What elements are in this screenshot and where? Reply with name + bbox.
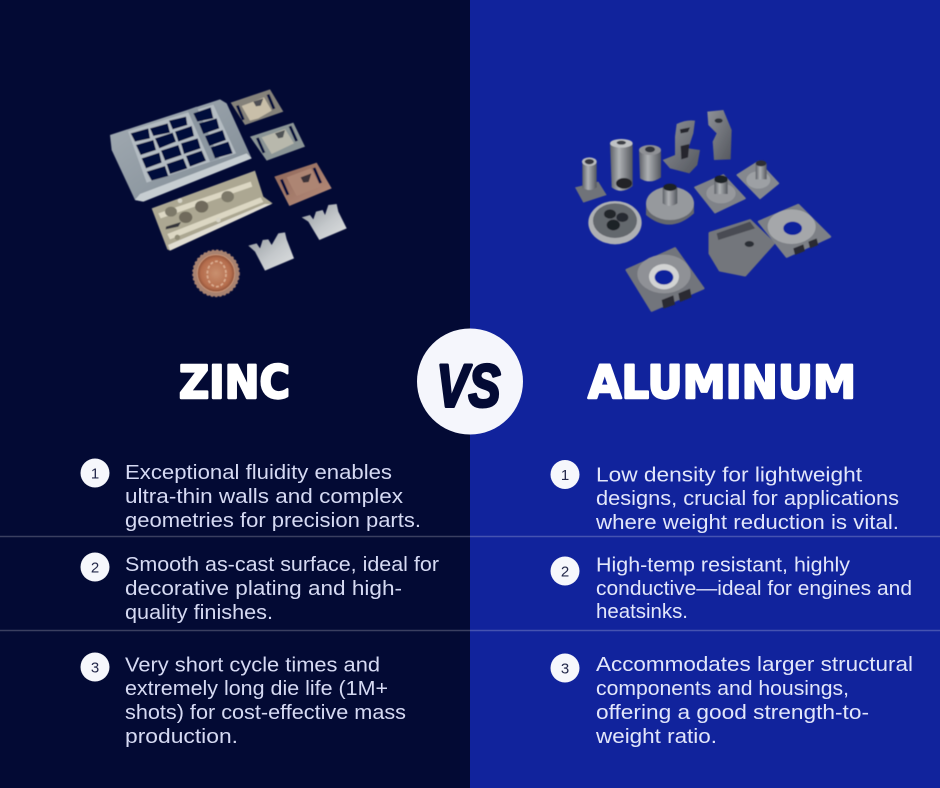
point 2 zinc: Smooth as-cast surface, ideal for [125,553,439,576]
point 3 aluminum: weight ratio. [595,725,717,748]
part: angled block [707,110,732,160]
point 2 aluminum: High-temp resistant, highly [596,554,851,576]
point 3 aluminum: components and housings, [596,677,849,700]
point 2 zinc: quality finishes. [125,601,273,624]
part: square flange middle [695,175,745,213]
point 3 zinc [80,652,406,748]
point 1 aluminum: where weight reduction is vital. [595,511,899,534]
part: short cylinder [639,145,661,181]
point 1 zinc: geometries for precision parts. [125,509,421,532]
part: clip two [302,204,347,240]
point 3 zinc: production. [125,725,238,748]
point 1 aluminum: 1 [561,467,569,484]
point 1 zinc: Exceptional fluidity enables [125,461,392,484]
point 1 aluminum [550,460,899,534]
point 2 zinc: 2 [91,560,99,576]
point 3 aluminum: offering a good strength-to- [596,701,869,724]
part: gray plate two [250,123,305,161]
panel: zinc background [0,0,470,788]
VS badge: VS [436,352,500,420]
list: aluminum points [550,460,913,748]
point 1 zinc [80,458,421,532]
part: ribbed bar [152,171,273,251]
point 2 aluminum: heatsinks. [596,600,688,623]
part: bottom square housing [627,248,703,311]
part: clip one [248,232,294,271]
point 3 aluminum [550,653,913,748]
list: zinc points [80,458,439,748]
illustration: aluminum die-cast parts [575,110,830,311]
part: zinc grid frame [110,99,252,202]
point 2 aluminum [550,554,912,623]
part: right square housing [759,205,830,257]
point 2 zinc [80,552,439,624]
point 2 aluminum: 2 [561,564,569,580]
point 3 zinc: Very short cycle times and [125,654,380,676]
part: copper coin [193,250,239,296]
part: large cast block [710,221,773,275]
row dividers [0,536,940,630]
point 2 zinc: decorative plating and high- [125,577,402,600]
point 3 aluminum: Accommodates larger structural [596,653,913,676]
part: forked bracket [663,120,700,173]
panel: aluminum background [470,0,940,788]
point 1 aluminum: designs, crucial for applications [596,487,899,510]
part: copper plate [274,163,332,206]
VS badge [417,328,523,434]
point 1 aluminum: Low density for lightweight [596,464,862,486]
part: tall cylinder [610,139,633,191]
part: round flange [646,184,694,225]
point 1 zinc: 1 [91,466,99,482]
illustration: zinc die-cast parts [110,89,347,296]
part: wheel with three bores [588,201,642,244]
point 3 zinc: shots) for cost-effective mass [125,701,406,724]
point 2 aluminum: conductive—ideal for engines and [596,577,912,600]
point 1 zinc: ultra-thin walls and complex [125,485,404,508]
point 3 zinc: extremely long die life (1M+ [125,677,388,700]
heading: aluminum: ALUMINUM [588,356,856,409]
part: diamond flange right [737,160,778,198]
point 3 aluminum: 3 [561,660,569,678]
part: small flanged tube [575,157,607,203]
part: gray plate one [231,89,283,125]
point 3 zinc: 3 [91,660,99,676]
heading: zinc: ZINC [179,356,290,409]
